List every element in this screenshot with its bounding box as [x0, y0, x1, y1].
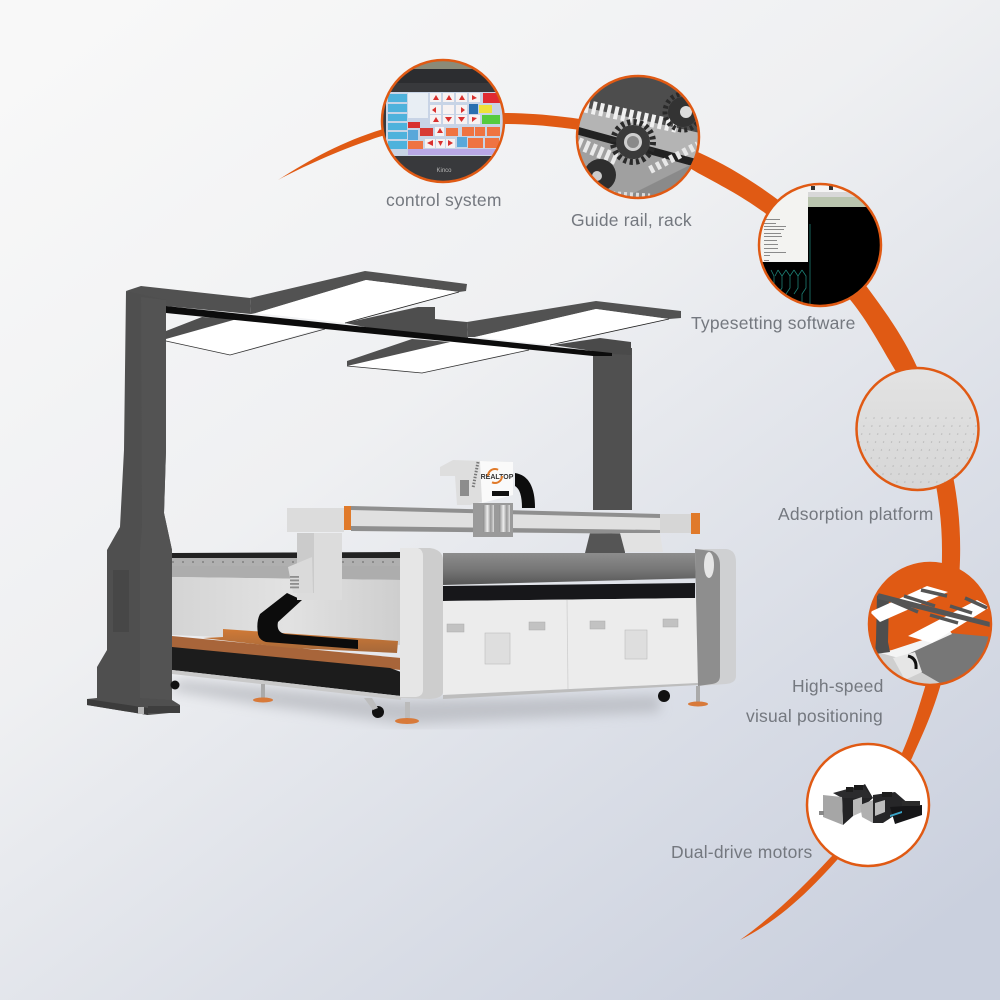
- left front post: [87, 291, 180, 715]
- icon: servo motors: [807, 744, 929, 866]
- feature: control system: [380, 58, 506, 210]
- feed roller: [443, 553, 712, 585]
- icon: nesting software screen: [760, 186, 880, 305]
- feature: guide rail, rack: [571, 74, 701, 230]
- label: dual-drive motors: Dual-drive motors: [671, 842, 813, 862]
- roller section: [443, 583, 695, 601]
- feature: high-speed visual positioning: [746, 562, 992, 726]
- ring: typesetting software: [759, 184, 881, 306]
- cable chain: [257, 593, 358, 649]
- rear table rail: [172, 552, 401, 580]
- product: vision cutting machine: [87, 271, 736, 725]
- silver bottom strip: [172, 670, 401, 700]
- ring: adsorption platform: [856, 368, 978, 490]
- orange side trim: [172, 629, 401, 670]
- ring: dual-drive motors: [807, 744, 929, 866]
- lower camera light panels: [166, 317, 530, 373]
- icon: camera light frame: [870, 564, 990, 684]
- floor shadow: [170, 680, 660, 725]
- feature: adsorption platform: [778, 367, 981, 524]
- brand mark on panel: Kinco: [436, 168, 452, 174]
- cutting head: [440, 460, 535, 537]
- label: adsorption platform: Adsorption platform: [778, 504, 934, 524]
- orange connecting arc: [278, 113, 960, 940]
- icon: control panel touchscreen: [380, 58, 506, 184]
- front white cabinet: [443, 598, 698, 699]
- icon: rack and pinion gears: [575, 74, 701, 200]
- right end plate: [695, 549, 736, 686]
- upper frame and camera light panels: [126, 271, 681, 356]
- label: guide rail, rack: Guide rail, rack: [571, 210, 692, 230]
- ring: guide rail: [577, 76, 699, 198]
- label: control system: control system: [386, 190, 502, 210]
- ring: control system: [382, 60, 504, 182]
- brand logo: REALTOP: [481, 474, 514, 481]
- feature: dual-drive motors: [671, 744, 929, 866]
- gantry beam: [287, 506, 700, 552]
- icon: perforated platform surface: [858, 369, 977, 488]
- label: visual positioning: visual positioning: [746, 706, 883, 726]
- right rear post: [553, 338, 632, 553]
- ring: high-speed visual positioning: [869, 563, 991, 685]
- table side panel: [172, 577, 401, 645]
- label: high-speed: High-speed: [792, 676, 884, 696]
- gantry left leg: [288, 533, 342, 600]
- black lower skirt: [172, 647, 401, 696]
- feature: typesetting software: [691, 182, 883, 333]
- label: typesetting software: Typesetting software: [691, 313, 856, 333]
- front feet and casters: [170, 680, 708, 724]
- left end plate: [400, 548, 443, 699]
